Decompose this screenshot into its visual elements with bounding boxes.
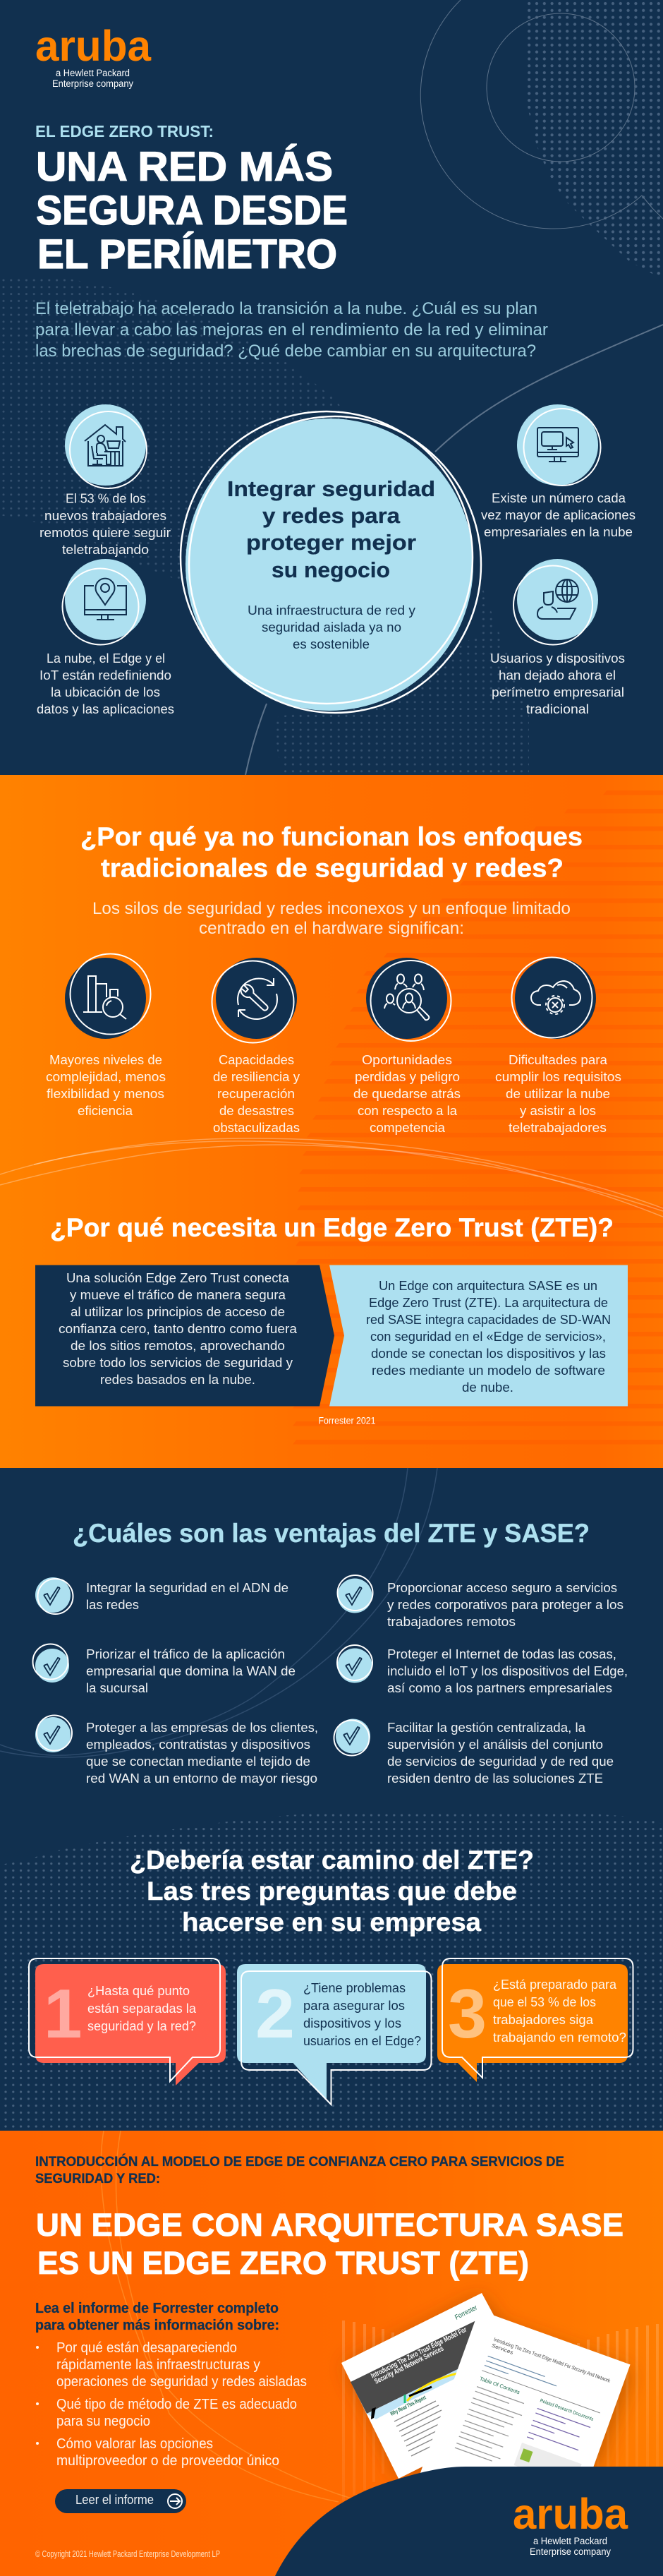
item: resilience: de resiliencia y [213,1069,300,1084]
central heading: Integrar seguridad [227,477,435,501]
item: remote workers [39,404,171,557]
bullet list [36,2340,307,2469]
benefit 5: red WAN a un entorno de mayor riesgo [86,1771,317,1786]
benefit 6: residen dentro de las soluciones ZTE [387,1771,603,1786]
central subtext: Una infraestructura de red y [248,603,416,618]
item: cloud requirements [495,957,621,1135]
heading kicker: EL EDGE ZERO TRUST: [35,122,214,140]
speech bubble 2: ¿Tiene problemas [303,1980,406,1995]
page: table of contents: Services [491,2342,514,2356]
benefit 5: empleados, contratistas y dispositivos [86,1737,310,1752]
central heading [227,477,435,582]
panel: SASE definition: Un Edge con arquitectura SASE es un [379,1278,597,1293]
icon: user with globe and laptop [537,579,578,619]
icon: check [337,1645,372,1683]
item: perimeter [490,559,625,716]
benefit 6: supervisión y el análisis del conjunto [387,1737,603,1752]
item: resilience [212,958,300,1135]
panel: SASE definition: de nube. [462,1380,513,1395]
item: cloud edge iot: IoT están redefiniendo [39,668,171,682]
copyright: © Copyright 2021 Hewlett Packard Enterprise Development LP [35,2549,220,2559]
report lead: para obtener más información sobre: [35,2318,279,2333]
speech bubble 2 [237,1964,432,2105]
item: remote workers: El 53 % de los [66,491,146,505]
panel: SASE definition [329,1265,628,1406]
item: cloud edge iot [37,559,174,716]
button [55,2489,186,2513]
item: missed opportunities: perdidas y peligro [355,1069,460,1084]
logo: aruba top: Enterprise company [52,78,133,89]
item: perimeter: han dejado ahora el [499,668,616,682]
central circle callout [181,411,481,713]
item: perimeter: Usuarios y dispositivos [490,651,625,666]
panel: ZTE definition: de los sitios remotos, aprovechando [71,1338,285,1353]
main title: EL PERÍMETRO [37,231,337,277]
item: cloud requirements: Dificultades para [509,1052,608,1067]
item: missed opportunities: Oportunidades [362,1052,452,1067]
speech bubble 3: trabajadores siga [493,2012,594,2027]
icon: wrench with cycle arrows [238,978,277,1019]
panel: ZTE definition: al utilizar los principios de acceso de [71,1304,285,1319]
bullet list: para su negocio [56,2413,150,2429]
page: table of contents [407,2310,631,2564]
benefit 3: la sucursal [86,1680,148,1695]
icon: check [334,1719,370,1756]
item: complexity: flexibilidad y menos [47,1086,164,1101]
icon: people with magnifier [384,974,429,1020]
benefit 4: incluido el IoT y los dispositivos del Edge, [387,1663,628,1678]
item: resilience: Capacidades [219,1052,294,1067]
benefit 4: así como a los partners empresariales [387,1680,612,1695]
navy corner [275,2467,663,2576]
heading: three questions: ¿Debería estar camino del ZTE? [130,1846,534,1874]
icon: check [35,1715,72,1752]
benefit 1 [35,1577,288,1614]
central heading: proteger mejor [246,531,416,555]
item: cloud requirements: de utilizar la nube [506,1086,610,1101]
speech bubble 1 [29,1958,226,2086]
item: missed opportunities [353,958,461,1135]
item: cloud apps: vez mayor de aplicaciones [481,507,635,522]
intro paragraph: para llevar a cabo las mejoras en el rendimiento de la red y eliminar [35,320,548,339]
benefit 2: trabajadores remotos [387,1614,516,1629]
heading: benefits: ¿Cuáles son las ventajas del ZTE y SASE? [73,1519,590,1548]
item: resilience: obstaculizadas [213,1120,300,1135]
heading: why traditional approaches fail: tradicionales de seguridad y redes? [101,854,564,882]
item: resilience: recuperación [217,1086,295,1101]
item: cloud apps [481,404,635,539]
icon: monitor with location pin [85,579,126,620]
panel: ZTE definition: confianza cero, tanto dentro como fuera [59,1321,298,1336]
benefit 3: Priorizar el tráfico de la aplicación [86,1647,285,1661]
section background: navy hero [0,0,663,775]
item: remote workers: nuevos trabajadores [44,508,166,523]
speech bubble 2: dispositivos y los [303,2016,401,2030]
intro paragraph: El teletrabajo ha acelerado la transición a la nube. ¿Cuál es su plan [35,299,537,318]
item: cloud edge iot: La nube, el Edge y el [47,651,165,666]
benefit 4 [337,1645,628,1695]
heading: why traditional approaches fail [80,822,583,882]
benefit 6 [334,1719,614,1786]
heading: why you need ZTE: ¿Por qué necesita un Edge Zero Trust (ZTE)? [50,1213,614,1242]
panel: ZTE definition: sobre todo los servicios de seguridad y [63,1355,293,1370]
logo: aruba bottom: a Hewlett Packard [533,2536,607,2546]
item: cloud requirements: y asistir a los [520,1103,596,1118]
item: resilience: de desastres [219,1103,294,1118]
page: back cover: Why Read This Report [389,2395,427,2417]
item: cloud requirements: teletrabajadores [509,1120,607,1135]
item: perimeter: perímetro empresarial [492,685,624,699]
main title: SEGURA DESDE [36,188,348,234]
speech bubble 3: trabajando en remoto? [493,2030,626,2045]
benefit 2: y redes corporativos para proteger a los [387,1597,624,1612]
page: table of contents: Introducing The Zero Trust Edge Model For Security And Network [493,2336,612,2384]
item: cloud apps: empresariales en la nube [484,524,633,539]
speech bubble 1: seguridad y la red? [87,2018,196,2033]
subheading: silos: Los silos de seguridad y redes inconexos y un enfoque limitado [92,899,571,918]
item: complexity [46,954,166,1118]
bullet list: Qué tipo de método de ZTE es adecuado [56,2396,297,2412]
report kicker [35,2153,564,2186]
icon: check [32,1644,69,1683]
page: table of contents: Related Research Documents [539,2398,594,2422]
panel: SASE definition: redes mediante un modelo de software [372,1363,605,1378]
speech bubble 2: para asegurar los [303,1998,405,2013]
heading: why traditional approaches fail: ¿Por qué ya no funcionan los enfoques [80,822,583,851]
speech bubble 2: usuarios en el Edge? [303,2033,421,2048]
benefit 6: Facilitar la gestión centralizada, la [387,1720,586,1735]
item: remote workers: teletrabajando [62,542,149,557]
logo: aruba top: aruba [35,22,152,70]
item: cloud edge iot: datos y las aplicaciones [37,702,174,716]
bullet list: multiproveedor o de proveedor único [56,2452,279,2469]
report lead [35,2301,279,2333]
report kicker: INTRODUCCIÓN AL MODELO DE EDGE DE CONFIANZA CERO PARA SERVICIOS DE [35,2153,564,2169]
page: back cover [341,2293,543,2479]
icon: check [337,1575,372,1613]
item: missed opportunities: con respecto a la [358,1103,458,1118]
speech bubble 1: están separadas la [87,2001,197,2016]
logo: aruba bottom: Enterprise company [530,2546,611,2557]
section background: orange why [0,775,663,1468]
item: cloud requirements: cumplir los requisitos [495,1069,621,1084]
benefit 5: Proteger a las empresas de los clientes, [86,1720,318,1735]
benefit 2 [337,1575,624,1629]
icon: bar chart with magnifier [83,976,126,1019]
speech bubble 3 [437,1958,633,2082]
panel: SASE definition: red SASE integra capacidades de SD-WAN [366,1312,611,1327]
item: cloud edge iot: la ubicación de los [51,685,160,699]
central subtext: seguridad aislada ya no [262,620,401,634]
panel: ZTE definition: redes basados en la nube. [100,1372,255,1387]
benefit 5 [35,1715,318,1786]
section background: navy benefits [0,1468,663,2131]
source note: Forrester 2021 [319,1416,375,1426]
panel: SASE definition: donde se conectan los dispositivos y las [371,1346,606,1361]
benefit 2: Proporcionar acceso seguro a servicios [387,1580,617,1595]
item: complexity: complejidad, menos [46,1069,166,1084]
panel: ZTE definition: Una solución Edge Zero Trust conecta [66,1270,290,1285]
speech bubble 3: ¿Está preparado para [493,1977,617,1992]
central heading: y redes para [262,504,401,528]
page: back cover: Introducing The Zero Trust Edge Model For [370,2325,468,2381]
bullet list: Cómo valorar las opciones [56,2436,213,2452]
central subtext [248,603,416,651]
item: missed opportunities: de quedarse atrás [353,1086,461,1101]
report title [36,2207,624,2281]
benefit 6: de servicios de seguridad y de red que [387,1754,614,1769]
main title: UNA RED MÁS [36,144,333,190]
panel: ZTE definition [35,1265,334,1406]
central subtext: es sostenible [293,637,370,651]
page: table of contents: Table Of Contents [479,2376,521,2395]
icon: check [35,1577,73,1614]
speech bubble 1: 1 [44,1975,83,2052]
page: back cover: Security And Network Services [373,2345,445,2386]
heading: three questions: Las tres preguntas que debe [147,1877,517,1906]
panel: SASE definition: con seguridad en el «Edge de servicios», [370,1329,606,1344]
item: complexity: eficiencia [78,1103,133,1118]
speech bubble 2: 2 [255,1975,295,2052]
icon: arrow [168,2494,182,2508]
item: complexity: Mayores niveles de [49,1052,162,1067]
benefit 3: empresarial que domina la WAN de [86,1663,296,1678]
subheading: silos [92,899,571,938]
icon: cloud with gear [531,981,580,1014]
benefit 1: las redes [86,1597,139,1612]
benefit 3 [32,1644,296,1695]
logo: aruba top: a Hewlett Packard [56,68,130,78]
section background: orange report [0,2131,663,2576]
report kicker: SEGURIDAD Y RED: [35,2171,160,2186]
panel: SASE definition: Edge Zero Trust (ZTE). La arquitectura de [369,1295,608,1310]
speech bubble 3: que el 53 % de los [493,1994,596,2009]
intro paragraph: las brechas de seguridad? ¿Qué debe cambiar en su arquitectura? [35,342,536,361]
report lead: Lea el informe de Forrester completo [35,2301,279,2316]
item: cloud apps: Existe un número cada [492,490,626,505]
subheading: silos: centrado en el hardware significan: [199,919,464,938]
page: back cover: Forrester [454,2304,479,2322]
item: missed opportunities: competencia [370,1120,446,1135]
bullet list: Por qué están desapareciendo [56,2340,237,2356]
item: perimeter: tradicional [526,702,589,716]
report pages image [341,2293,631,2564]
speech bubble 1: ¿Hasta qué punto [87,1983,190,1998]
report title: UN EDGE CON ARQUITECTURA SASE [36,2207,624,2243]
panel: ZTE definition: y mueve el tráfico de manera segura [70,1287,286,1302]
logo: aruba bottom: aruba [513,2490,628,2538]
icon: monitor with cursor [537,428,578,462]
intro paragraph [35,299,548,361]
main title [36,144,348,277]
central heading: su negocio [272,558,390,582]
button: Leer el informe [75,2492,154,2507]
bullet list: operaciones de seguridad y redes aisladas [56,2373,307,2390]
benefit 1: Integrar la seguridad en el ADN de [86,1580,288,1595]
speech bubble 3: 3 [448,1975,487,2052]
benefit 5: que se conectan mediante el tejido de [86,1754,310,1769]
icon: house with worker [85,425,126,466]
item: remote workers: remotos quiere seguir [39,525,171,540]
benefit 4: Proteger el Internet de todas las cosas, [387,1647,616,1661]
heading: three questions: hacerse en su empresa [182,1908,481,1937]
report title: ES UN EDGE ZERO TRUST (ZTE) [37,2245,529,2281]
heading: three questions [130,1846,534,1937]
bullet list: rápidamente las infraestructuras y [56,2357,261,2373]
